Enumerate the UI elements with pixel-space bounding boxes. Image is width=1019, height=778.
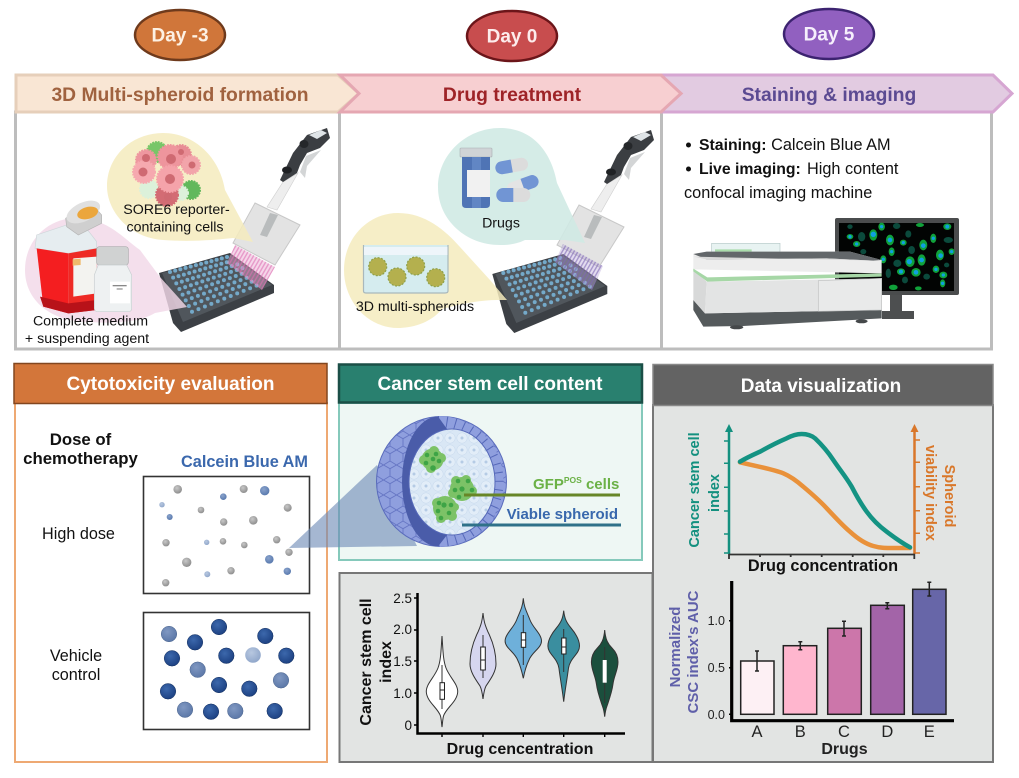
- label: high dose: High dose: [42, 525, 115, 543]
- right axis label: viability index: [922, 445, 938, 541]
- violin axes: [414, 593, 625, 737]
- label: vehicle control: control: [52, 666, 100, 684]
- left axis: [724, 424, 733, 554]
- right axis: [910, 424, 920, 554]
- right axis label: [922, 445, 957, 541]
- panel body: [339, 403, 642, 560]
- pill 1: [494, 157, 529, 175]
- panel: drug treatment illustration: [344, 128, 654, 333]
- left axis label: Cancer stem cell: [687, 432, 703, 548]
- violin 5: [591, 630, 618, 717]
- bar y ticks: 1.0: [708, 614, 725, 628]
- top panels frame: [16, 112, 992, 349]
- panel: violin plot: [340, 573, 652, 762]
- bar y ticks: [708, 614, 725, 722]
- staining text: High content: [807, 160, 899, 178]
- day badge: Day 0: Day 0: [487, 26, 537, 48]
- label: dose: chemotherapy: [23, 449, 139, 468]
- zoom wedge from cell to spheroid: [289, 465, 417, 548]
- bar x ticks: D: [881, 723, 893, 741]
- monitor cell image: [847, 223, 955, 290]
- day badge: Day 5: [784, 9, 874, 59]
- chevron: Drug treatment: [340, 75, 681, 112]
- violin 1: [426, 636, 458, 727]
- left axis label: index: [707, 474, 723, 512]
- pipette tips: [227, 245, 275, 290]
- day badge: Day -3: Day -3: [151, 26, 209, 46]
- bar x ticks: A: [751, 723, 763, 741]
- bars: [741, 589, 946, 714]
- monitor: [835, 218, 959, 319]
- heading: Cancer stem cell content: [378, 374, 603, 395]
- panel: staining and imaging: [684, 136, 959, 329]
- violin y label: [358, 598, 395, 726]
- y tick labels: 2.5: [393, 591, 412, 606]
- chevron: 3D Multi-spheroid formation: 3D Multi-spheroid formation: [51, 85, 309, 106]
- day badge: Day 0: [467, 11, 557, 61]
- error bars: [755, 582, 931, 671]
- bar y label: [667, 590, 702, 714]
- bubble: medium: [25, 218, 187, 323]
- chevron: Staining & imaging: Staining & imaging: [742, 85, 916, 106]
- y tick labels: 1.5: [393, 654, 412, 669]
- violin 2: [470, 613, 496, 699]
- bar axes: [732, 581, 954, 721]
- line chart: [687, 424, 957, 575]
- y tick labels: 1.0: [393, 686, 412, 701]
- violin y label: Cancer stem cell: [358, 598, 375, 726]
- pill 2: [505, 173, 540, 197]
- GFP nuclei: [424, 452, 474, 520]
- bar x ticks: [751, 723, 935, 741]
- staining text: Live imaging:: [699, 161, 801, 178]
- y tick labels: 0: [404, 718, 412, 733]
- violin 4: [548, 611, 580, 702]
- label: GFP pos cells: cells: [582, 476, 619, 493]
- y tick labels: 2.0: [393, 622, 412, 637]
- label: GFP pos cells: [464, 475, 620, 495]
- panel: cytotoxicity evaluation: [14, 364, 327, 762]
- bar x ticks: E: [924, 723, 935, 741]
- label: Calcein Blue AM: Calcein Blue AM: [181, 453, 308, 471]
- bar x ticks: B: [795, 723, 806, 741]
- panel header: data visualization: Data visualization: [741, 376, 901, 397]
- x axis: [729, 554, 915, 559]
- label: dose: Dose of: [50, 430, 112, 449]
- well plate: [159, 253, 274, 332]
- flask: [35, 196, 104, 313]
- outer ring cells: [438, 422, 498, 542]
- panel header: [14, 364, 327, 404]
- label: medium: + suspending agent: [25, 331, 149, 347]
- spheroid diagram: [376, 416, 506, 546]
- box: vehicle control cells: [144, 612, 310, 730]
- box: high dose cells: [144, 476, 310, 594]
- teal curve: [740, 434, 910, 547]
- violin x label: Drug cencentration: [447, 741, 593, 758]
- bubble: reporter cells: [107, 133, 253, 242]
- panel header: [339, 364, 642, 402]
- label: GFP pos cells: POS: [564, 475, 582, 485]
- y tick labels: [393, 591, 412, 733]
- pipette: [557, 130, 654, 267]
- bar y label: CSC index's AUC: [685, 590, 702, 714]
- violin 3: [505, 598, 542, 678]
- bar y ticks: 0.0: [708, 708, 725, 722]
- pill bottle: [460, 148, 492, 208]
- panel: spheroid formation illustration: [25, 128, 330, 347]
- dark cut band: [402, 416, 447, 546]
- panel: cancer stem cell content: [339, 364, 642, 560]
- label: vehicle control: Vehicle: [50, 647, 102, 665]
- staining text: Staining: Calcein Blue AM: [699, 136, 891, 154]
- bar y ticks: 0.5: [708, 661, 725, 675]
- chevron: Drug treatment: Drug treatment: [443, 85, 582, 106]
- day badge: Day -3: [135, 10, 225, 60]
- heading: Cytotoxicity evaluation: [66, 374, 274, 395]
- violin y label: index: [378, 641, 395, 683]
- bubble: multi-spheroids: [344, 213, 507, 328]
- right axis label: Spheroid: [941, 465, 957, 527]
- label: GFP pos cells: GFP: [533, 476, 564, 493]
- well plate: [492, 254, 607, 333]
- pipette tips: [555, 244, 603, 290]
- bar x ticks: C: [838, 723, 850, 741]
- staining text: [684, 136, 899, 202]
- bubble: drugs: [438, 128, 585, 245]
- cells cluster: [133, 142, 200, 206]
- label: multi-spheroids: 3D multi-spheroids: [356, 299, 474, 315]
- label: drugs: Drugs: [482, 216, 520, 232]
- dish with spheroids: [364, 245, 448, 293]
- label: reporter cells: SORE6 reporter-: [123, 202, 230, 218]
- spheroid interior: [409, 429, 495, 535]
- chevron: 3D Multi-spheroid formation: [16, 75, 359, 112]
- bar y label: Normalized: [667, 607, 684, 687]
- orange curve: [740, 462, 910, 548]
- confocal imaging machine: [693, 243, 882, 329]
- left axis label: [687, 432, 723, 548]
- panel body: [15, 403, 327, 762]
- pipette: [233, 128, 330, 265]
- label: reporter cells: containing cells: [126, 220, 224, 236]
- bar chart: [667, 581, 954, 758]
- cell nuclei: [138, 149, 196, 201]
- chevron: Staining & imaging: [660, 75, 1012, 112]
- staining text: confocal imaging machine: [684, 184, 872, 202]
- panel: data visualization background: [653, 405, 993, 762]
- bar x label: Drugs: [821, 741, 868, 758]
- day badge: Day 5: Day 5: [804, 24, 855, 46]
- label: medium: Complete medium: [33, 314, 148, 330]
- panel header: data visualization: [653, 364, 993, 406]
- x axis label: Drug concentration: [748, 557, 898, 575]
- pill 3: [496, 188, 530, 202]
- label: viable spheroid: Viable spheroid: [507, 506, 618, 523]
- small bottle: [94, 247, 132, 312]
- GFP cell clusters: [419, 446, 477, 523]
